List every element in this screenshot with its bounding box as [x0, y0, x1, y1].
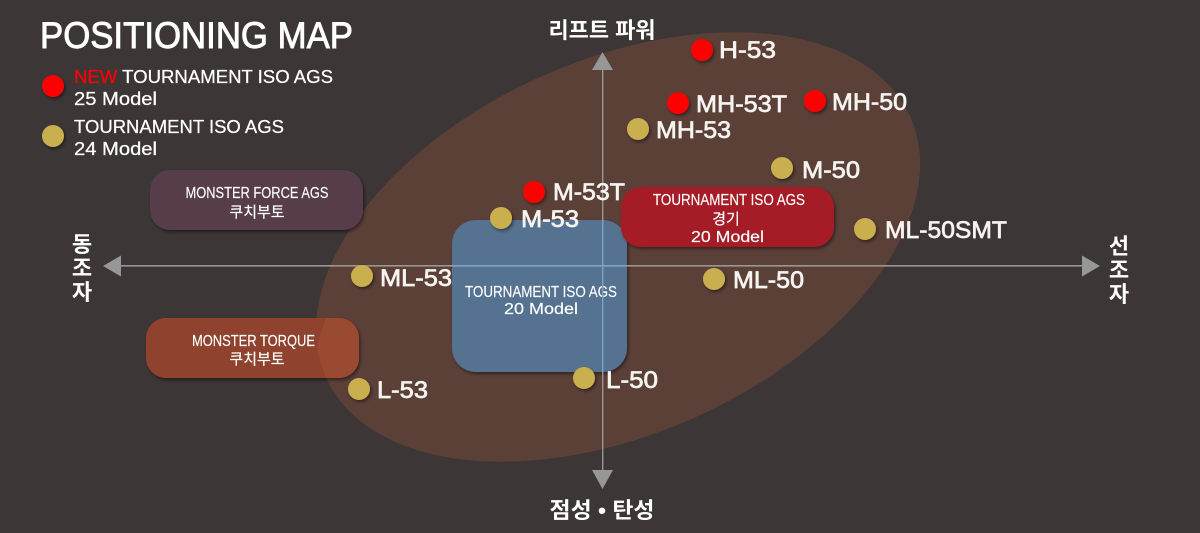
- point: ML-50: [703, 267, 804, 294]
- axis label: right: [1109, 234, 1129, 307]
- panel: monster torque: [146, 318, 359, 378]
- panel: monster force AGS: 쿠치부토: [229, 204, 285, 221]
- point: ML-50: ML-50: [733, 267, 804, 294]
- point: ML-50SMT: ML-50SMT: [885, 217, 1007, 244]
- axis label: bottom: 점성 • 탄성: [550, 498, 654, 523]
- point: MH-50: MH-50: [832, 89, 907, 116]
- axis label: left: 동: [72, 232, 92, 257]
- axis label: top: 리프트 파워: [548, 18, 656, 43]
- point: H-53: [691, 37, 776, 64]
- panel: tournament ISO AGS race: 경기: [712, 211, 740, 228]
- point: M-50: [771, 157, 860, 184]
- legend: tournament: TOURNAMENT ISO AGS: [74, 116, 284, 137]
- point: M-53: [490, 206, 579, 233]
- point: L-53: [348, 377, 428, 404]
- point: MH-53: [627, 117, 731, 144]
- axis label: right: 조: [1109, 258, 1129, 283]
- vertical axis arrow: [592, 52, 613, 489]
- axis label: right: 자: [1109, 282, 1129, 307]
- panel: monster torque: 쿠치부토: [229, 351, 285, 368]
- panel: monster force AGS: [150, 170, 363, 230]
- point: L-50: [573, 367, 658, 394]
- point: M-53: M-53: [521, 206, 579, 233]
- panel: tournament ISO AGS 20 model: 20 Model: [504, 301, 578, 318]
- legend: tournament: [42, 116, 284, 159]
- point: MH-53: MH-53: [656, 117, 731, 144]
- panel: monster torque: MONSTER TORQUE: [192, 333, 315, 350]
- panel: monster force AGS: MONSTER FORCE AGS: [186, 185, 328, 202]
- legend: tournament: 24 Model: [74, 138, 157, 159]
- point: MH-50: [804, 89, 907, 116]
- point: H-53: H-53: [719, 37, 776, 64]
- horizontal axis arrow: [103, 256, 1100, 276]
- axis label: left: 조: [72, 256, 92, 281]
- legend: new tournament: NEW TOURNAMENT ISO AGS: [74, 66, 333, 87]
- panel: tournament ISO AGS race: 20 Model: [691, 229, 764, 246]
- point: L-53: L-53: [377, 377, 428, 404]
- legend: new tournament: 25 Model: [74, 88, 157, 109]
- axis label: left: 자: [72, 280, 92, 305]
- panel: tournament ISO AGS race: [621, 187, 834, 247]
- panel: tournament ISO AGS 20 model: [452, 220, 627, 372]
- panel: tournament ISO AGS race: TOURNAMENT ISO AGS: [653, 192, 805, 209]
- legend: new tournament: [42, 66, 333, 109]
- point: ML-53: ML-53: [380, 265, 452, 292]
- point: ML-53: [351, 265, 452, 292]
- title: POSITIONING MAP: [40, 15, 353, 56]
- point: M-53T: [523, 179, 625, 206]
- point: M-53T: M-53T: [553, 179, 625, 206]
- panel: tournament ISO AGS 20 model: TOURNAMENT ISO AGS: [465, 284, 617, 301]
- axis label: right: 선: [1109, 234, 1129, 259]
- point: M-50: M-50: [802, 157, 860, 184]
- ellipse: market area: [250, 0, 986, 533]
- axis label: left: [72, 232, 92, 305]
- point: L-50: L-50: [606, 367, 658, 394]
- point: MH-53T: MH-53T: [696, 91, 787, 118]
